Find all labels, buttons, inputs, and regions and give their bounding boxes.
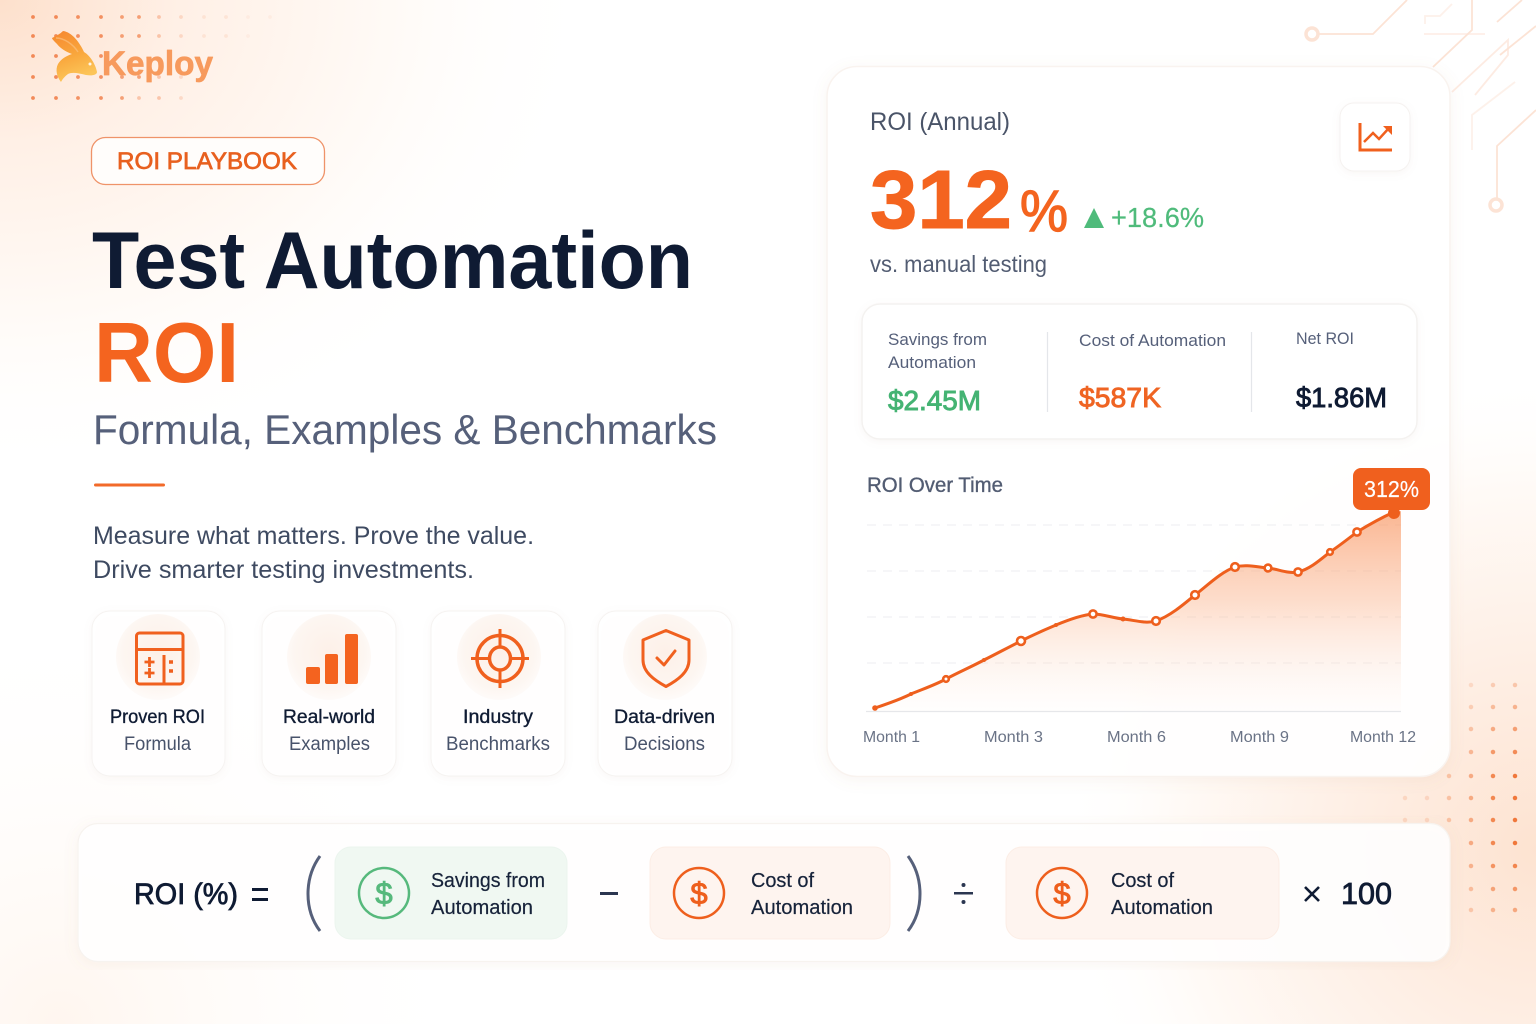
term: cost of automation: Cost of (751, 870, 814, 892)
caption: vs. manual testing: vs. manual testing (870, 251, 1047, 277)
stat: cost: Cost of Automation (1079, 331, 1226, 350)
icon: rabbit (52, 31, 97, 82)
operator: divide (954, 883, 973, 904)
operator: times 100 (1305, 876, 1392, 911)
stat: savings: $2.45M (888, 385, 981, 416)
term: cost of automation: Automation (751, 897, 853, 919)
metric: 312% (870, 153, 1068, 246)
stat: savings: Automation (888, 353, 976, 372)
heading: ROI (Annual): ROI (Annual) (870, 108, 1010, 136)
feature card: Real-world Examples (262, 611, 396, 776)
feature card: Proven ROI Formula (92, 611, 225, 776)
feature card: Data-driven Decisions: Decisions (624, 734, 705, 755)
feature card: Industry Benchmarks: Industry (463, 707, 534, 728)
icon: shield check (643, 630, 689, 686)
feature card: Proven ROI Formula: Proven ROI (110, 707, 205, 728)
tagline (93, 522, 534, 584)
stat: savings: Savings from (888, 330, 987, 349)
icon: trend chart button (1340, 103, 1410, 171)
panel: ROI dashboard (827, 66, 1450, 776)
term: savings from automation: $ (375, 876, 393, 911)
panel: ROI formula (78, 824, 1450, 962)
logo wordmark: Keploy (102, 45, 213, 83)
icon: target (471, 629, 529, 688)
term: cost of automation (divisor): Cost of (1111, 870, 1174, 892)
icon: calculator (136, 633, 183, 684)
term: savings from automation: Automation (431, 897, 533, 919)
operator: times 100: 100 (1341, 876, 1392, 911)
x axis labels: Month 12 (1350, 729, 1416, 746)
term: cost of automation (divisor): $ (1053, 876, 1071, 911)
title (92, 216, 693, 401)
decorative circuit lines: top right (1306, 0, 1536, 211)
term: cost of automation (divisor): Automation (1111, 897, 1213, 919)
feature card: Data-driven Decisions (598, 611, 732, 776)
stat: cost: $587K (1079, 382, 1161, 413)
stat: savings (888, 330, 987, 416)
callout: 312% (1353, 468, 1430, 519)
stat: net ROI: Net ROI (1296, 329, 1354, 348)
x axis labels: Month 9 (1230, 729, 1289, 746)
term: cost of automation (650, 847, 890, 939)
title: ROI (94, 306, 239, 401)
stat: net ROI: $1.86M (1296, 382, 1387, 413)
callout: 312%: 312% (1364, 476, 1419, 502)
decorative dot grid: top left (33, 17, 270, 98)
panel: cost summary (862, 304, 1417, 439)
term: savings from automation: Savings from (431, 870, 545, 892)
x axis labels: Month 3 (984, 729, 1043, 746)
feature card: Industry Benchmarks (431, 611, 565, 776)
feature card: Industry Benchmarks: Benchmarks (446, 734, 550, 755)
feature card: Real-world Examples: Examples (289, 734, 370, 755)
feature card: Proven ROI Formula: Formula (124, 734, 191, 755)
logo: Keploy (52, 31, 213, 83)
metric change: +18.6%: +18.6% (1111, 202, 1204, 233)
stat: net ROI (1296, 329, 1387, 413)
x axis labels: Month 6 (1107, 729, 1166, 746)
metric: 312%: % (1020, 179, 1068, 244)
term: cost of automation (divisor) (1006, 847, 1279, 939)
term: savings from automation (335, 847, 567, 939)
stat: cost (1079, 331, 1226, 413)
decorative dot grid: bottom right (1405, 685, 1515, 910)
icon: bar chart (306, 634, 358, 684)
line chart: ROI over time (863, 468, 1430, 746)
formula label: ROI (%) =: ROI (%) (134, 878, 238, 911)
heading: ROI Over Time: ROI Over Time (867, 474, 1003, 497)
tagline: Drive smarter testing investments. (93, 556, 474, 584)
feature card: Real-world Examples: Real-world (283, 707, 375, 728)
badge: ROI PLAYBOOK (92, 138, 324, 184)
title: Test Automation (92, 216, 693, 306)
x axis labels: Month 1 (863, 729, 920, 746)
feature card: Data-driven Decisions: Data-driven (614, 707, 715, 728)
tagline: Measure what matters. Prove the value. (93, 522, 534, 550)
badge: ROI PLAYBOOK: ROI PLAYBOOK (117, 148, 297, 175)
metric: 312%: 312 (870, 153, 1012, 246)
x axis labels (863, 729, 1416, 746)
term: cost of automation: $ (690, 876, 708, 911)
subtitle: Formula, Examples & Benchmarks (93, 406, 717, 453)
